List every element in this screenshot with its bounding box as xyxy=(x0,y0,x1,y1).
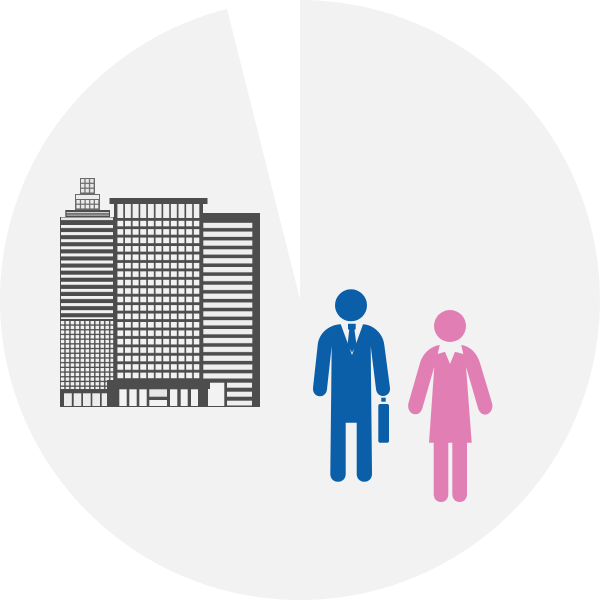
man necktie xyxy=(348,324,356,352)
icon: businesswoman xyxy=(408,310,492,502)
building: middle tower xyxy=(107,198,210,407)
woman head xyxy=(434,310,466,342)
building: right tower xyxy=(203,213,260,407)
man shirt collar xyxy=(340,324,363,355)
man head xyxy=(335,289,367,321)
icon: office buildings xyxy=(60,178,260,407)
woman collar xyxy=(438,342,463,364)
icon: businessman with briefcase xyxy=(313,289,390,482)
briefcase handle xyxy=(381,398,386,402)
briefcase xyxy=(378,404,389,443)
woman body xyxy=(408,345,492,502)
building: left tower xyxy=(60,178,115,407)
man body xyxy=(313,324,390,482)
